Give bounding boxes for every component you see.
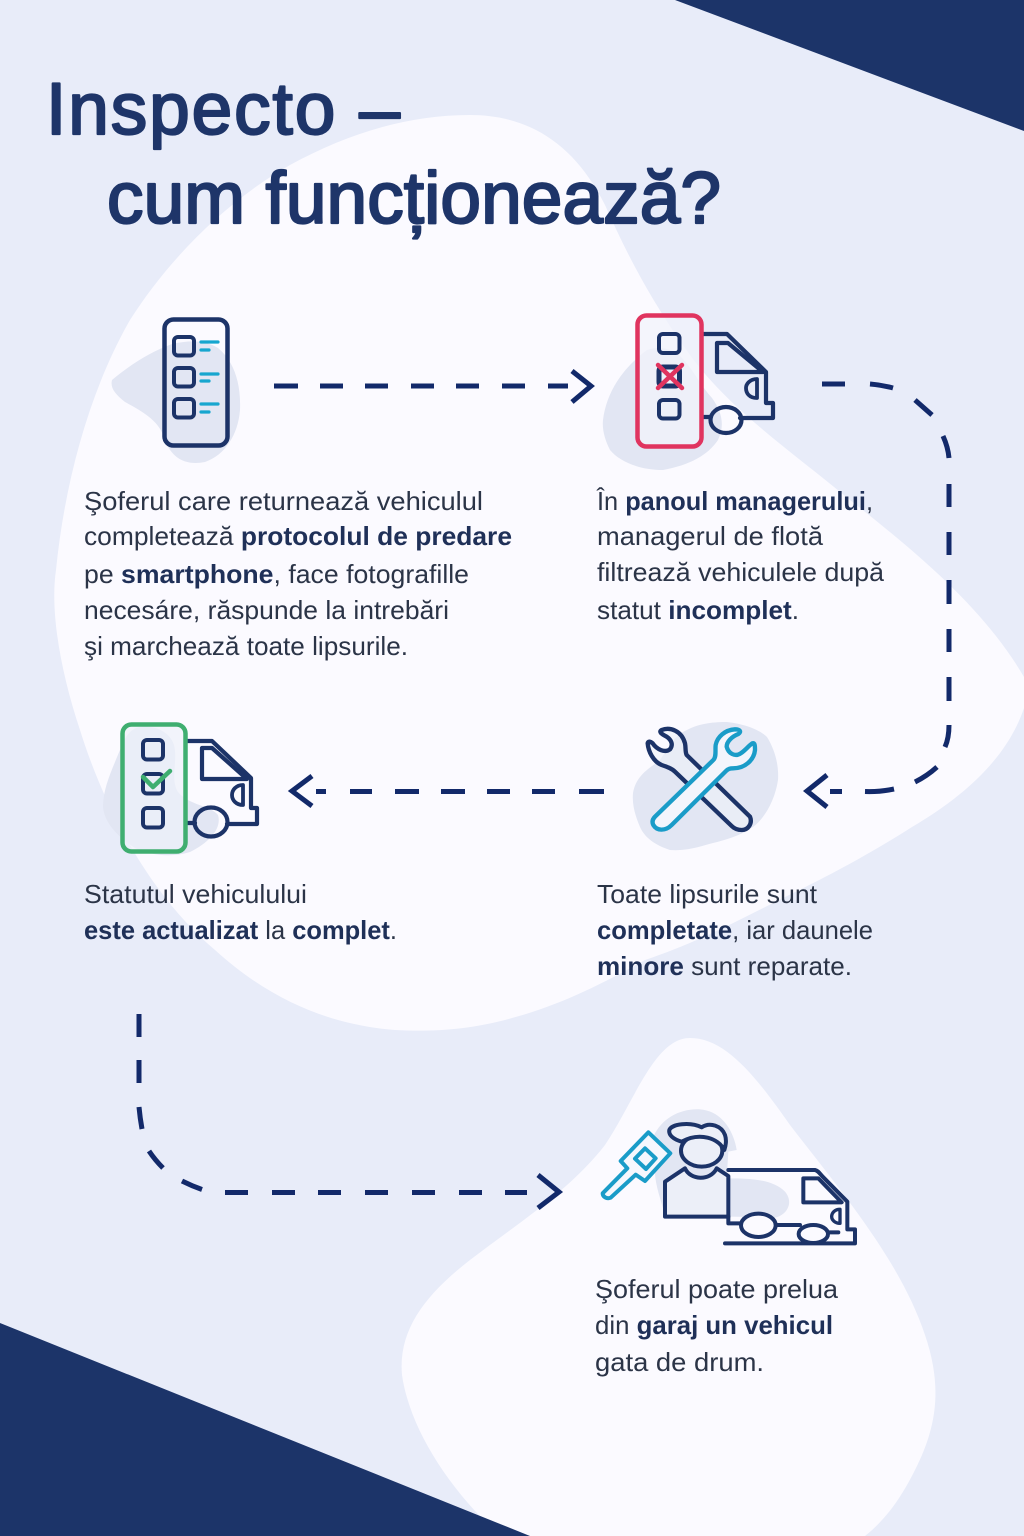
text: step 2: statut incomplet.	[597, 595, 799, 625]
driver	[665, 1168, 728, 1217]
text: step 1: şi marchează toate lipsurile.	[84, 631, 408, 661]
arrow: step 2 to step 3	[807, 384, 949, 807]
cyan wrench	[653, 729, 755, 830]
truck	[725, 1170, 855, 1243]
text: step 4: completate, iar daunele	[597, 915, 873, 945]
background blob: main	[54, 115, 1024, 1031]
text: step 1: necesáre, răspunde la intrebări	[84, 595, 449, 625]
text: step 2: În panoul managerului,	[596, 486, 873, 516]
text: step 3: este actualizat la complet.	[84, 915, 397, 945]
text: step 3	[84, 879, 397, 945]
arrow: step 3 to step 4	[292, 776, 604, 806]
text: step 5: Şoferul poate prelua	[595, 1274, 839, 1304]
title: Inspecto –	[46, 69, 400, 150]
text: step 1	[84, 486, 512, 661]
icon: phone checklist	[112, 320, 240, 463]
arrow: step 4 to step 5	[139, 1014, 559, 1208]
text: step 5: din garaj un vehicul	[595, 1310, 833, 1340]
title: cum funcționează?	[107, 158, 721, 239]
arrow: step 1 to step 2	[274, 371, 591, 402]
text: step 5	[595, 1274, 839, 1377]
text: step 4	[597, 879, 873, 981]
title	[46, 69, 721, 239]
icon: driver with key and truck	[603, 1109, 855, 1243]
text: step 2: filtrează vehiculele după	[597, 557, 885, 587]
icon: truck with red cross checklist	[603, 316, 773, 470]
text: step 3: Statutul vehiculului	[84, 879, 307, 909]
text: step 1: Şoferul care returnează vehiculul	[84, 486, 483, 516]
corner shape: bottom left	[0, 1323, 530, 1536]
background blob: lower	[402, 1038, 935, 1536]
text: step 4: Toate lipsurile sunt	[597, 879, 818, 909]
text: step 1: pe smartphone, face fotografille	[84, 559, 469, 589]
text: step 5: gata de drum.	[595, 1347, 764, 1377]
text: step 4: minore sunt reparate.	[597, 951, 852, 981]
icon: crossed wrenches	[633, 722, 778, 850]
key	[603, 1132, 670, 1198]
text: step 2: managerul de flotă	[597, 521, 824, 551]
text: step 2	[596, 486, 885, 625]
text: step 1: completează protocolul de predare	[84, 521, 512, 551]
navy wrench	[648, 729, 751, 830]
icon: truck with green check checklist	[103, 724, 257, 855]
corner shape: top right	[675, 0, 1024, 131]
icon blob	[653, 1109, 789, 1217]
